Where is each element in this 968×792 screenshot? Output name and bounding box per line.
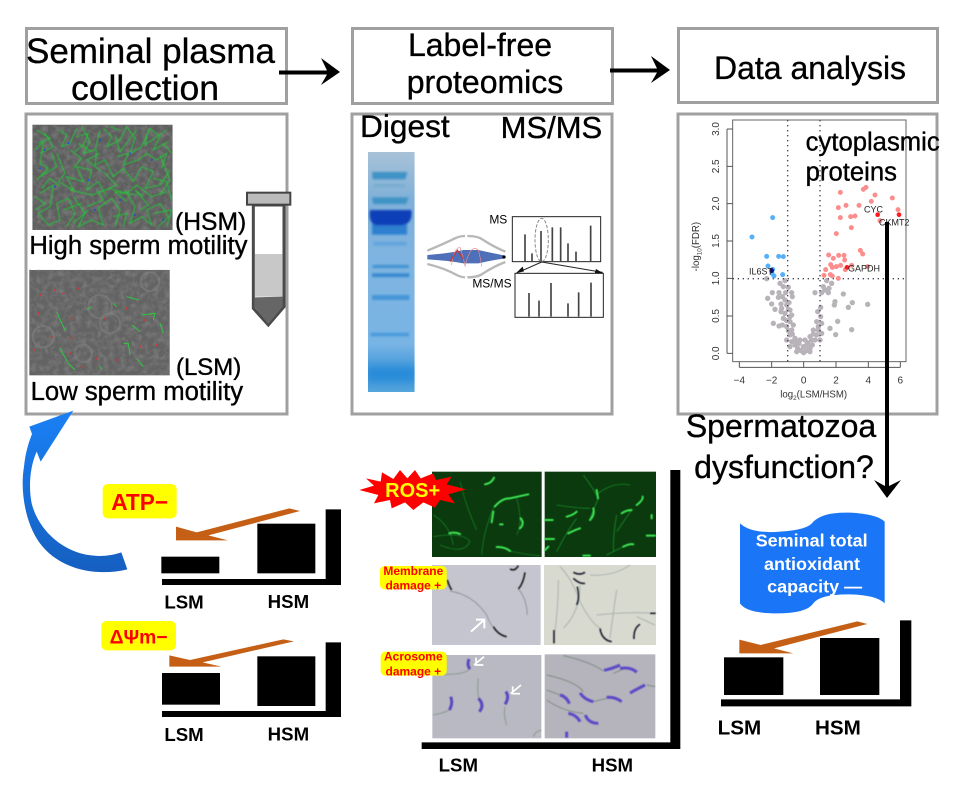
volcano plot: 2 — [833, 375, 839, 386]
antioxidant panel — [718, 513, 911, 740]
label: LSM: LSM — [718, 717, 761, 740]
box: label-free proteomics: Label-free — [408, 27, 552, 63]
volcano plot: -log — [691, 255, 702, 271]
axis — [162, 642, 341, 717]
volcano plot: 1.0 — [711, 271, 722, 285]
volcano plot: 0 — [801, 375, 807, 386]
label: LSM: (LSM) — [176, 354, 241, 381]
arrow: proteomics to analysis — [610, 56, 670, 83]
volcano plot: −2 — [766, 375, 778, 386]
box: label-free proteomics — [352, 27, 612, 104]
label: digest: Digest — [360, 108, 450, 144]
panel: sample collection — [26, 114, 290, 414]
image: membrane HSM — [544, 565, 656, 645]
volcano plot: 10 — [697, 248, 704, 255]
icon: centrifuge tube — [247, 193, 290, 325]
label: MS/MS small: MS/MS — [472, 276, 512, 290]
bar: HSM — [257, 524, 315, 573]
label: cytoplasmic proteins: proteins — [806, 158, 897, 186]
arrow: down to antioxidant capacity — [874, 222, 901, 498]
image: acrosome LSM — [432, 655, 541, 738]
banner: seminal total antioxidant capacity — [740, 513, 885, 613]
image: acrosome HSM — [545, 654, 655, 738]
panel: proteomics — [352, 108, 612, 414]
volcano plot: −4 — [734, 375, 745, 386]
badge: membrane damage: damage + — [386, 579, 441, 593]
arrow: decrease — [739, 621, 867, 653]
badge: membrane damage — [380, 564, 447, 593]
label: low sperm motility: Low sperm motility — [31, 378, 243, 406]
volcano plot: log — [780, 389, 793, 400]
label: HSM: HSM — [815, 717, 861, 740]
box: seminal plasma collection: collection — [71, 68, 219, 108]
label: MS: MS — [489, 212, 507, 226]
volcano plot: 4 — [866, 375, 872, 386]
badge: ATP — [103, 484, 177, 518]
label: LSM: LSM — [164, 592, 204, 613]
chart: MS spectrum — [489, 212, 601, 262]
badge: ROS starburst: ROS+ — [385, 480, 440, 502]
bar: LSM — [724, 657, 783, 695]
bar: LSM — [162, 673, 220, 705]
axis — [721, 620, 911, 706]
badge: acrosome damage — [381, 650, 447, 679]
chart: membrane potential bars — [101, 621, 341, 745]
icon: electrospray emitter — [427, 236, 506, 277]
arrow: curved blue feedback arrow — [23, 411, 127, 572]
gel lane — [368, 152, 415, 392]
label: LSM: LSM — [164, 724, 204, 745]
badge: delta psi m: ΔΨm− — [110, 627, 168, 648]
bar: HSM — [820, 638, 879, 695]
label: high sperm motility: High sperm motility — [29, 232, 248, 260]
axis — [422, 470, 680, 749]
volcano plot: 1.5 — [711, 234, 722, 248]
volcano plot: 2 — [793, 395, 797, 402]
axis — [162, 509, 341, 585]
label: MS/MS: MS/MS — [501, 110, 602, 145]
volcano plot: CKMT2 — [879, 217, 909, 227]
volcano plot — [691, 120, 909, 402]
badge: ATP: ATP− — [111, 489, 168, 515]
volcano plot: 0.0 — [711, 346, 722, 360]
label: HSM: (HSM) — [175, 209, 246, 236]
label: cytoplasmic proteins: cytoplasmic — [806, 129, 940, 157]
volcano plot: GAPDH — [848, 264, 880, 274]
badge: delta psi m — [101, 621, 176, 650]
arrow: decrease — [176, 508, 300, 540]
bar: HSM — [257, 656, 315, 706]
label: LSM: LSM — [439, 755, 478, 776]
banner: seminal total antioxidant capacity: Seminal total — [756, 531, 868, 551]
box: label-free proteomics: proteomics — [407, 64, 563, 100]
banner: seminal total antioxidant capacity: antioxidant — [764, 554, 860, 574]
panel: data analysis volcano plot — [678, 114, 940, 414]
arrow: decrease — [169, 639, 294, 667]
volcano plot: (LSM/HSM) — [797, 389, 847, 400]
chart: ATP bars — [103, 484, 341, 613]
box: data analysis — [678, 28, 938, 102]
box: data analysis: Data analysis — [714, 50, 906, 86]
image: ROS HSM — [545, 472, 656, 557]
micrograph: low motility tracks — [29, 270, 170, 375]
label: HSM: HSM — [268, 723, 309, 744]
bar: LSM — [161, 557, 219, 573]
label: spermatozoa dysfunction: Spermatozoa — [686, 408, 876, 444]
image: membrane LSM — [432, 565, 541, 645]
chart: MS/MS spectrum — [472, 262, 603, 317]
volcano plot: 2.5 — [711, 159, 722, 173]
badge: acrosome damage: Acrosome — [384, 650, 443, 664]
badge: ROS starburst — [359, 470, 466, 510]
badge: acrosome damage: damage + — [386, 665, 441, 679]
volcano plot: 2.0 — [711, 196, 722, 211]
label: HSM: HSM — [592, 755, 633, 776]
badge: membrane damage: Membrane — [383, 564, 444, 578]
box: seminal plasma collection: Seminal plasma — [26, 32, 276, 71]
volcano plot: CYC — [864, 204, 883, 214]
volcano plot: 0.5 — [711, 309, 722, 323]
label: spermatozoa dysfunction: dysfunction? — [694, 449, 874, 485]
arrow: collection to proteomics — [279, 58, 340, 85]
micrograph grid — [359, 470, 680, 776]
volcano plot: (FDR) — [691, 222, 702, 248]
image: ROS LSM — [432, 472, 542, 557]
box: seminal plasma collection — [26, 28, 286, 108]
banner: seminal total antioxidant capacity: capacity — — [767, 577, 862, 597]
volcano plot: IL6ST — [749, 266, 773, 276]
micrograph: high motility tracks — [32, 125, 173, 230]
volcano plot: 3.0 — [711, 122, 722, 136]
label: HSM: HSM — [268, 591, 309, 612]
volcano plot: 6 — [898, 375, 904, 386]
